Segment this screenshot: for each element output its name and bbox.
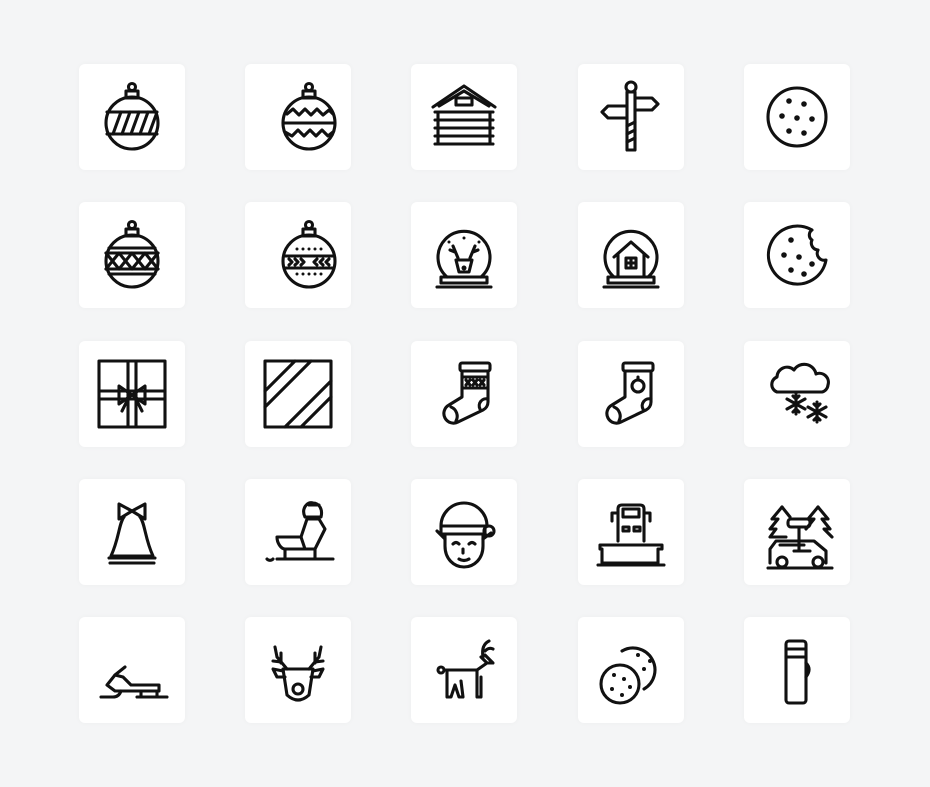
- card: cookie: [744, 64, 850, 170]
- card: reindeer standing: [411, 617, 517, 723]
- card: bitten cookie: [744, 202, 850, 308]
- card: ornament arrows: [245, 202, 351, 308]
- card: snowmobile: [79, 617, 185, 723]
- card: two cookies: [578, 617, 684, 723]
- card: signpost: [578, 64, 684, 170]
- card: ornament cross: [79, 202, 185, 308]
- card: bell: [79, 479, 185, 585]
- card: ornament zigzag: [245, 64, 351, 170]
- card: log cabin: [411, 64, 517, 170]
- card: cloud snow: [744, 341, 850, 447]
- card: thermos: [744, 617, 850, 723]
- card: car with trees: [744, 479, 850, 585]
- card: sleigh: [245, 479, 351, 585]
- card: stocking xxx: [411, 341, 517, 447]
- card: gift with bow: [79, 341, 185, 447]
- card: elf: [411, 479, 517, 585]
- card: stocking ornament: [578, 341, 684, 447]
- card: snowplow: [578, 479, 684, 585]
- card: reindeer head: [245, 617, 351, 723]
- card: ornament striped: [79, 64, 185, 170]
- card: gift striped: [245, 341, 351, 447]
- card: snow globe reindeer: [411, 202, 517, 308]
- card: snow globe house: [578, 202, 684, 308]
